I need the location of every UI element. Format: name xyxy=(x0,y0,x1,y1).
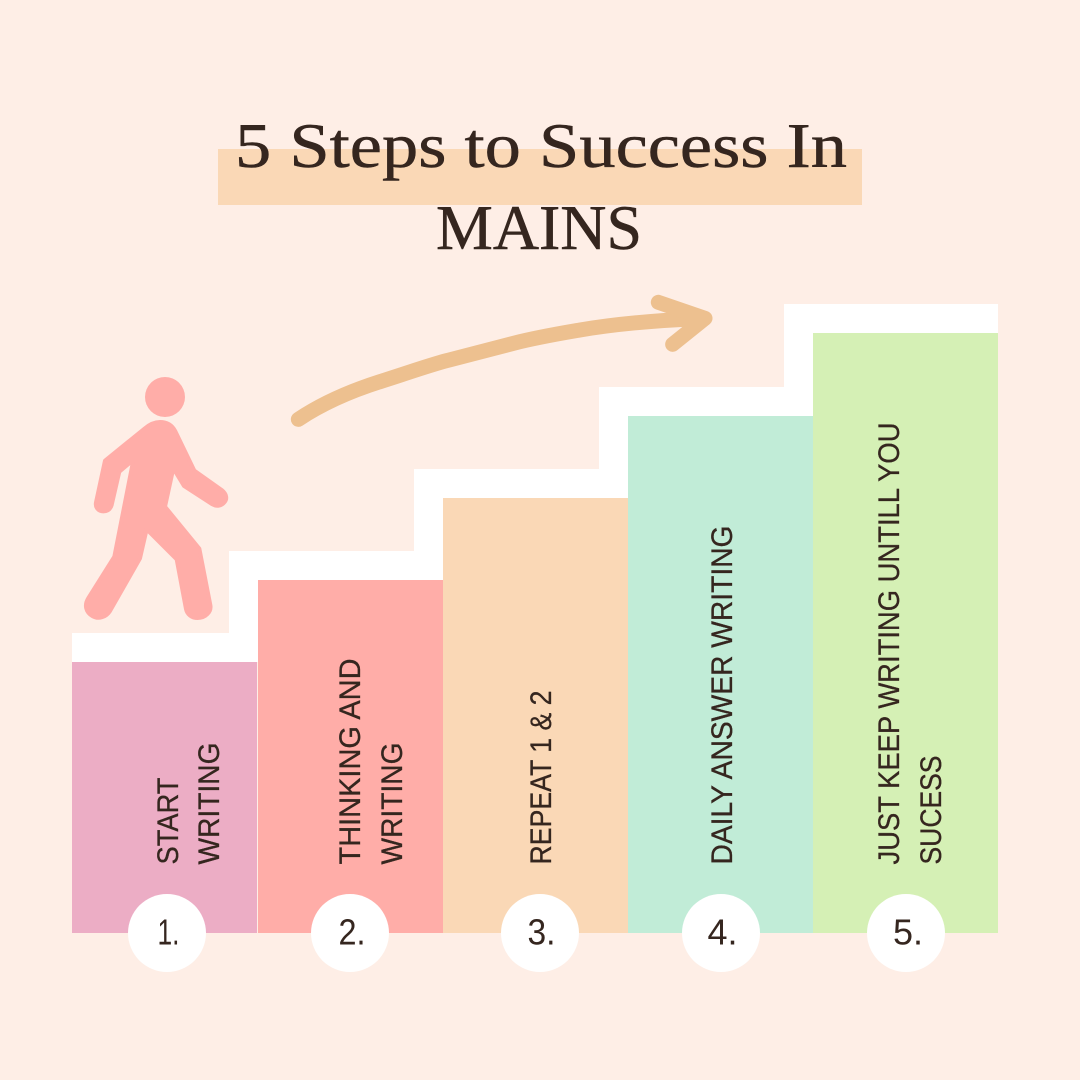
number badge 3: 3. xyxy=(528,912,556,952)
step 5: just keep writing until you success: JUST KEEP WRITING UNTILL YOU xyxy=(873,422,906,864)
step 4: daily answer writing xyxy=(599,387,813,933)
number badge 5 xyxy=(867,894,945,972)
step 2: thinking and writing: WRITING xyxy=(376,742,409,864)
arrow: rising progress xyxy=(298,302,705,419)
step 1: start writing: WRITING xyxy=(193,742,226,864)
title with highlight band: MAINS xyxy=(436,192,642,263)
step 2: thinking and writing xyxy=(229,551,443,933)
number badge 5: 5. xyxy=(893,912,923,952)
step 3: repeat 1 and 2: REPEAT 1 & 2 xyxy=(525,690,558,864)
number badge 4 xyxy=(682,894,760,972)
step 3: repeat 1 and 2 xyxy=(414,469,628,933)
step 5: just keep writing until you success: SUCESS xyxy=(915,756,948,864)
step 1: start writing: START xyxy=(152,778,185,864)
number badge 3 xyxy=(501,894,579,972)
icon: walking person xyxy=(86,377,226,618)
number badge 4: 4. xyxy=(707,912,738,952)
step 5: just keep writing until you success xyxy=(784,304,998,933)
number badge 2 xyxy=(311,894,389,972)
title with highlight band: 5 Steps to Success In xyxy=(235,110,847,181)
number badge 1 xyxy=(128,894,206,972)
number badge 1: 1. xyxy=(158,912,180,952)
title with highlight band xyxy=(218,110,862,263)
number badge 2: 2. xyxy=(338,912,366,952)
step 1: start writing xyxy=(72,633,258,933)
step 4: daily answer writing: DAILY ANSWER WRITING xyxy=(706,526,739,864)
step 2: thinking and writing: THINKING AND xyxy=(334,658,367,864)
